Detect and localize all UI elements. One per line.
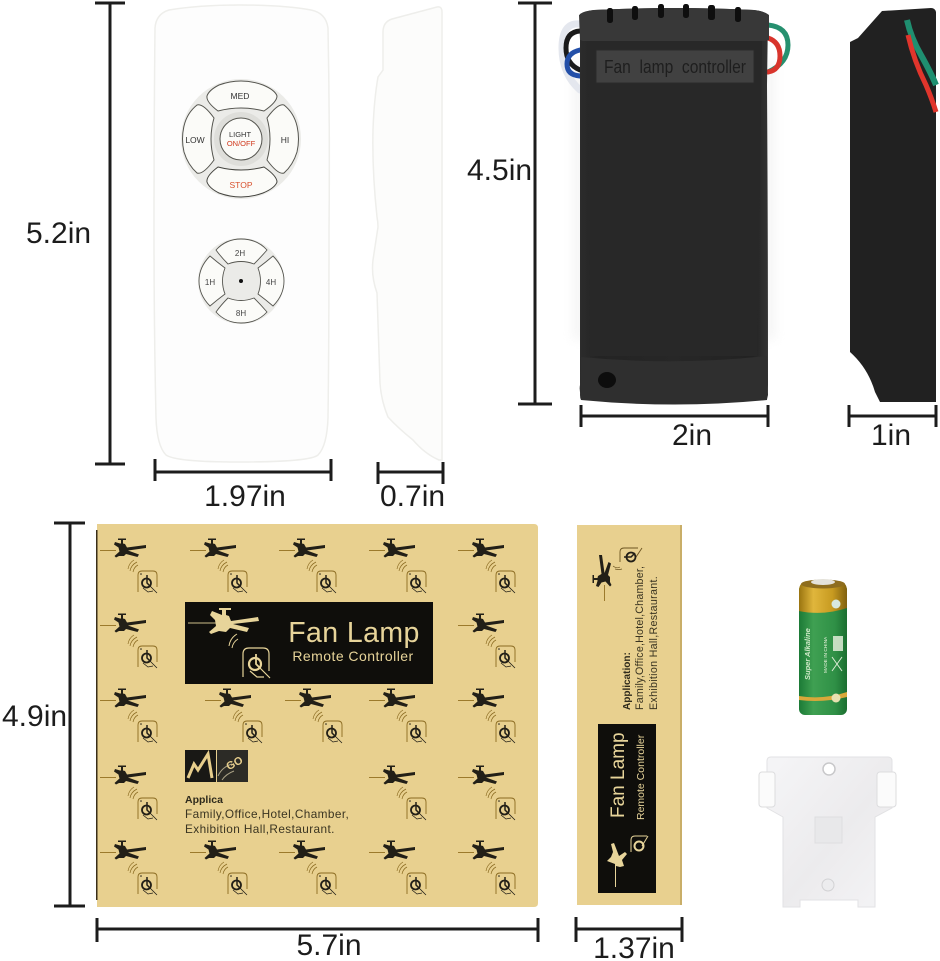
wall mount clip bbox=[759, 757, 896, 907]
LIGHT ON/OFF button: ON/OFF bbox=[227, 139, 256, 148]
label heading: Fan Lamp bbox=[288, 617, 420, 649]
name plate: Fan lamp controller bbox=[604, 57, 746, 77]
package box side bbox=[577, 525, 682, 905]
minus terminal mark bbox=[832, 694, 840, 702]
battery label: Super Alkaline bbox=[803, 628, 812, 680]
battery: MADE IN CHINA bbox=[823, 636, 829, 673]
application text: Applica bbox=[185, 794, 223, 806]
controller body bbox=[580, 8, 768, 402]
centre emboss bbox=[815, 817, 842, 843]
side body bbox=[850, 8, 936, 402]
label subheading: Remote Controller bbox=[292, 648, 414, 664]
green wire bbox=[907, 20, 936, 85]
dimension: remote height 5.2in bbox=[26, 3, 125, 464]
side fan icon bbox=[592, 555, 612, 601]
repeating fan and remote icons bbox=[100, 538, 515, 895]
soft shadow bbox=[572, 60, 776, 340]
black title label bbox=[185, 602, 433, 684]
black label: Fan Lamp bbox=[608, 732, 629, 818]
certification badge bbox=[185, 750, 248, 782]
side remote icon bbox=[613, 548, 642, 570]
LOW button: LOW bbox=[185, 135, 205, 145]
controller front view bbox=[562, 4, 788, 404]
battery bbox=[799, 579, 847, 715]
right tab bbox=[877, 772, 896, 807]
dimension: controller width 2in: 2in bbox=[672, 419, 712, 452]
dimension: remote depth 0.7in: 0.7in bbox=[380, 480, 445, 513]
dimension: controller width 2in bbox=[581, 405, 768, 452]
dimension: box height 4.9in: 4.9in bbox=[2, 700, 67, 733]
wires left bbox=[562, 24, 580, 90]
top screw hole bbox=[823, 763, 835, 775]
indicator dot bbox=[239, 279, 243, 283]
application text rotated: Application: bbox=[622, 652, 633, 710]
LIGHT ON/OFF button bbox=[214, 112, 268, 166]
application text: Family,Office,Hotel,Chamber, bbox=[185, 807, 349, 821]
box left edge bbox=[96, 530, 98, 900]
dimension: remote width 1.97in bbox=[155, 459, 331, 513]
screw hole bbox=[598, 372, 616, 388]
black label bbox=[598, 724, 656, 893]
main control pad bbox=[181, 79, 301, 199]
inner recess bbox=[588, 41, 762, 356]
label fan icon bbox=[188, 622, 216, 624]
remote body bbox=[154, 5, 329, 462]
remote control side view bbox=[372, 7, 442, 460]
wires right bbox=[768, 25, 788, 72]
2H button: 2H bbox=[235, 249, 245, 258]
red wire bbox=[908, 35, 936, 112]
top cap bbox=[579, 8, 769, 41]
timer pad bbox=[198, 238, 284, 324]
gold top band bbox=[799, 581, 847, 613]
MED button: MED bbox=[231, 91, 249, 101]
battery body bbox=[799, 584, 847, 715]
vent slots bbox=[607, 4, 741, 23]
remote control front view bbox=[154, 5, 329, 462]
dimension: remote depth 0.7in bbox=[378, 462, 445, 513]
side panel bbox=[577, 525, 682, 905]
black label: Remote Controller bbox=[635, 734, 647, 820]
application text rotated: Exhibition Hall,Restaurant. bbox=[648, 576, 660, 710]
box panel bbox=[97, 524, 538, 907]
4H button: 4H bbox=[266, 278, 276, 287]
application text: Exhibition Hall,Restaurant. bbox=[185, 822, 335, 836]
dimension: controller height 4.5in bbox=[467, 3, 552, 404]
dimension: controller height 4.5in: 4.5in bbox=[467, 154, 532, 187]
dimension: remote width 1.97in: 1.97in bbox=[204, 480, 286, 513]
bottom screw hole bbox=[822, 879, 834, 891]
STOP button: STOP bbox=[230, 180, 253, 190]
HI button: HI bbox=[281, 135, 289, 145]
name plate bbox=[596, 50, 754, 83]
dimension: controller depth 1in: 1in bbox=[871, 419, 911, 452]
bottom cap bbox=[580, 356, 768, 404]
application text rotated bbox=[622, 566, 660, 710]
label remote icon bbox=[229, 634, 270, 678]
8H button: 8H bbox=[236, 309, 246, 318]
dimension: box depth 1.37in bbox=[576, 917, 682, 961]
controller side view bbox=[850, 8, 936, 402]
application text rotated: Family,Office,Hotel,Chamber, bbox=[634, 566, 646, 710]
left tab bbox=[759, 772, 775, 807]
label remote icon bbox=[631, 836, 648, 852]
gold bottom stripe bbox=[799, 692, 847, 701]
certification badge: GO bbox=[224, 754, 245, 773]
dimension: box width 5.7in bbox=[97, 918, 538, 961]
recycle mark bbox=[833, 636, 843, 651]
dimension: remote height 5.2in: 5.2in bbox=[26, 217, 91, 250]
label fan icon bbox=[607, 843, 627, 887]
top terminal bbox=[801, 580, 845, 588]
1H button: 1H bbox=[205, 278, 215, 287]
application text bbox=[185, 794, 349, 836]
package box front bbox=[96, 524, 538, 907]
dimension: controller depth 1in bbox=[849, 405, 936, 452]
plus terminal mark bbox=[832, 600, 840, 608]
clip plate bbox=[767, 757, 892, 907]
dimension: box height 4.9in bbox=[2, 523, 85, 906]
LIGHT ON/OFF button: LIGHT bbox=[229, 130, 251, 139]
